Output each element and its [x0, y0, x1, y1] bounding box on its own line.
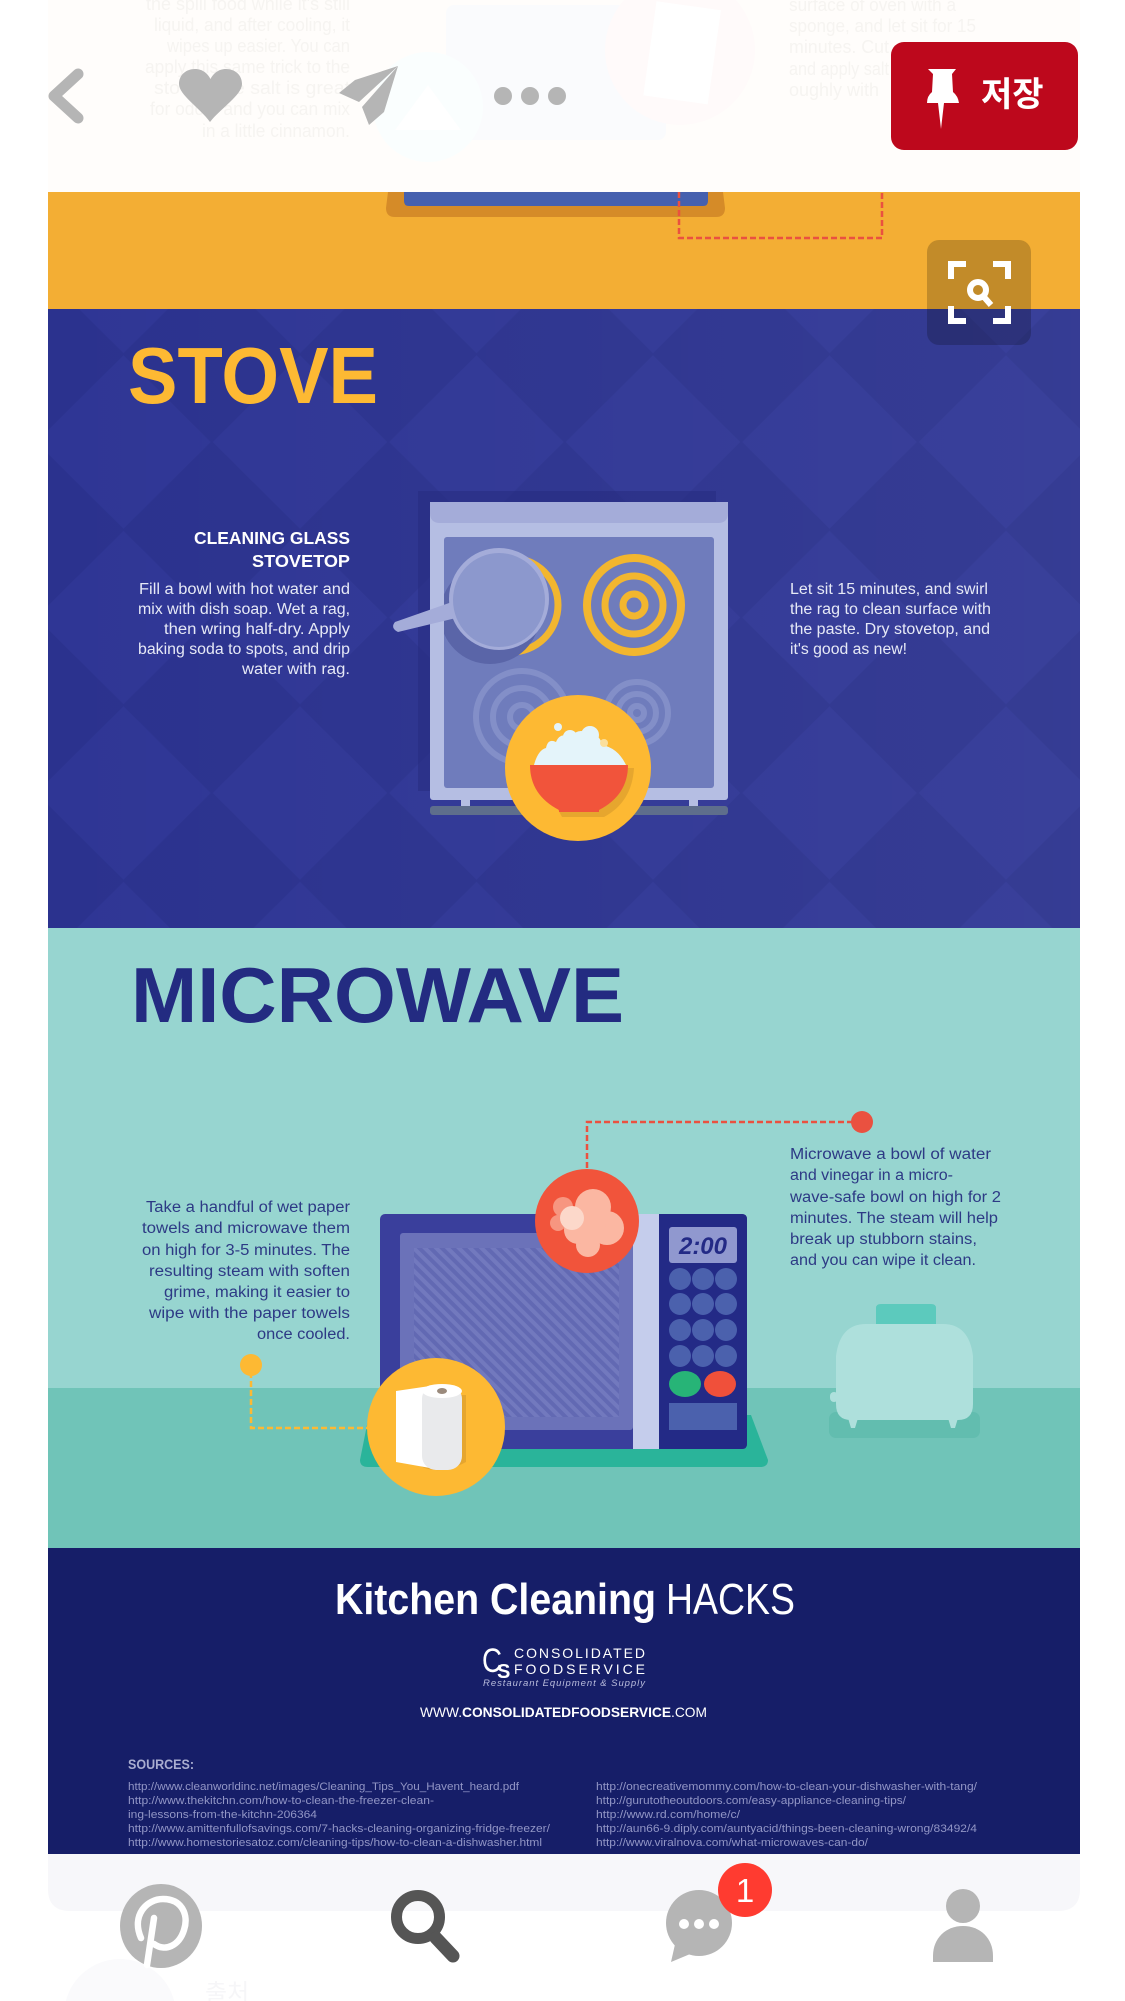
sources column 2: http://gurutotheoutdoors.com/easy-appliance-cleaning-tips/ — [596, 1795, 907, 1807]
footer title: HACKS — [666, 1575, 795, 1624]
icon: pin — [927, 69, 959, 129]
door handle bar — [633, 1214, 659, 1449]
text block: stove right: it's good as new! — [790, 641, 907, 658]
text block: microwave right: and vinegar in a micro- — [790, 1167, 953, 1184]
focus corners — [951, 264, 1008, 321]
back-left burner — [464, 558, 558, 652]
text block: cleaning glass stovetop: CLEANING GLASS — [194, 528, 350, 548]
sources column 1: http://www.thekitchn.com/how-to-clean-the-freezer-clean- — [128, 1795, 434, 1807]
back-right burner — [587, 558, 681, 652]
ghost illustration — [373, 0, 755, 162]
text block: cleaning glass stovetop: Fill a bowl with hot water and — [139, 581, 350, 598]
text block: stove right — [790, 581, 991, 658]
ghost text left: wipes up easier. You can — [166, 36, 350, 56]
notification badge: 1 — [736, 1872, 754, 1909]
panel: stove — [48, 309, 1080, 928]
text block: microwave left: grime, making it easier to — [164, 1284, 350, 1301]
top nav: send — [339, 66, 398, 125]
sources column 2: http://www.viralnova.com/what-microwaves-can-do/ — [596, 1837, 869, 1849]
sources column 2: http://aun66-9.diply.com/auntyacid/things-been-cleaning-wrong/83492/4 — [596, 1823, 977, 1835]
text block: microwave right: wave-safe bowl on high for 2 — [789, 1189, 1001, 1206]
top faded preview panel — [48, 0, 1080, 192]
text block: microwave right: break up stubborn stains, — [790, 1231, 977, 1248]
text block: microwave left: wipe with the paper towels — [148, 1305, 350, 1322]
sources heading: SOURCES: — [128, 1757, 194, 1772]
ghost text right — [789, 0, 976, 100]
top nav: more dots — [494, 87, 566, 105]
ghost text left: for odors and you can mix — [150, 99, 350, 119]
text block: stove right: Let sit 15 minutes, and swirl — [790, 581, 988, 598]
icon: frying pan — [393, 548, 549, 664]
ghost text left: in a little cinnamon. — [202, 121, 350, 141]
text block: microwave left — [142, 1199, 350, 1343]
control panel: 2:00 — [678, 1233, 728, 1260]
text block: microwave right: minutes. The steam will help — [790, 1210, 998, 1227]
top nav: back chevron — [54, 74, 78, 118]
icon: steam cloud — [535, 1169, 639, 1273]
logo: consolidated foodservice: Restaurant Equipment & Supply — [483, 1678, 646, 1689]
sources column 1: http://www.amittenfullofsavings.com/7-hacks-cleaning-organizing-fridge-freezer/ — [128, 1823, 551, 1835]
save button: 저장 — [981, 76, 1044, 114]
text block: stove right: the rag to clean surface with — [790, 601, 991, 618]
microwave illustration — [360, 1214, 768, 1467]
red dashed connector — [679, 192, 882, 238]
orange oven section — [48, 192, 1080, 309]
text block: cleaning glass stovetop: baking soda to spots, and drip — [138, 641, 350, 658]
toaster — [829, 1304, 980, 1438]
ghost text left: apply this same trick to the — [145, 57, 350, 77]
yellow dashed connector with dot — [240, 1354, 372, 1428]
bottom card edge — [48, 1854, 1080, 1911]
text block: microwave right — [789, 1146, 1001, 1269]
ghost text right: sponge, and let sit for 15 — [789, 16, 976, 36]
sources column 2: http://www.rd.com/home/c/ — [596, 1809, 741, 1821]
sources column 1: http://www.cleanworldinc.net/images/Cleaning_Tips_You_Havent_heard.pdf — [128, 1781, 520, 1793]
website url: WWW.CONSOLIDATEDFOODSERVICE.COM — [420, 1704, 707, 1720]
text block: cleaning glass stovetop: water with rag. — [241, 661, 350, 678]
icon: soapy bowl — [505, 695, 651, 841]
heading: stove: STOVE — [128, 331, 378, 420]
text block: cleaning glass stovetop — [138, 528, 350, 678]
ghost text right: and apply salt — [789, 59, 889, 79]
magnifier — [970, 282, 991, 305]
logo: consolidated foodservice: FOODSERVICE — [514, 1661, 645, 1677]
ghost text left: stove. The salt is great — [154, 78, 350, 98]
logo: consolidated foodservice — [482, 1642, 646, 1689]
control panel — [659, 1214, 747, 1449]
bottom nav: search — [396, 1896, 453, 1956]
sources column 2: http://onecreativemommy.com/how-to-clean-your-dishwasher-with-tang/ — [596, 1781, 978, 1793]
text block: microwave left: Take a handful of wet paper — [146, 1199, 350, 1216]
text block: cleaning glass stovetop: mix with dish soap. Wet a rag, — [138, 601, 350, 618]
sources column 1: http://www.homestoriesatoz.com/cleaning-tips/how-to-clean-a-dishwasher.html — [128, 1837, 542, 1849]
text block: microwave left: resulting steam with soften — [149, 1263, 350, 1280]
visual search button — [927, 240, 1031, 345]
red dashed connector with dot — [587, 1111, 873, 1168]
stove feet — [430, 800, 728, 815]
text block: stove right: the paste. Dry stovetop, and — [790, 621, 990, 638]
ghost text right: minutes. Cut — [789, 37, 889, 57]
logo: consolidated foodservice: S — [497, 1661, 510, 1683]
text block: microwave left: towels and microwave them — [142, 1220, 350, 1237]
text block: cleaning glass stovetop: then wring half-dry. Apply — [164, 621, 350, 638]
ghost text left: liquid, and after cooling, it — [154, 15, 350, 35]
sources column 1: ing-lessons-from-the-kitchn-206364 — [128, 1809, 317, 1821]
icon: paper towel roll — [367, 1358, 505, 1496]
footer title: Kitchen Cleaning — [335, 1575, 656, 1624]
bottom nav: profile — [933, 1889, 993, 1962]
panel: microwave — [48, 928, 1080, 1548]
sources column 1 — [128, 1781, 551, 1849]
stove illustration — [393, 491, 728, 815]
heading: microwave: MICROWAVE — [131, 951, 624, 1039]
oven base shadow — [386, 192, 725, 217]
oven base — [404, 192, 708, 206]
logo: consolidated foodservice: CONSOLIDATED — [514, 1645, 645, 1661]
microwave door — [400, 1233, 633, 1430]
ghost text left — [145, 0, 350, 141]
bottom nav: chat — [666, 1890, 732, 1962]
logo: consolidated foodservice: C — [482, 1642, 502, 1680]
panel: footer — [48, 1548, 1080, 1854]
save button — [891, 42, 1078, 150]
text block: microwave right: Microwave a bowl of water — [790, 1146, 991, 1163]
ghost next card — [64, 1959, 249, 2001]
text block: microwave left: once cooled. — [257, 1326, 350, 1343]
text block: cleaning glass stovetop: STOVETOP — [252, 551, 350, 571]
counter mat — [360, 1415, 768, 1467]
text block: microwave right: and you can wipe it clean. — [790, 1252, 976, 1269]
top nav: heart — [179, 69, 242, 122]
ghost text right: oughly with — [789, 80, 879, 100]
sources column 2 — [596, 1781, 978, 1849]
text block: microwave left: on high for 3-5 minutes. The — [142, 1242, 350, 1259]
front burners — [476, 671, 668, 763]
notification badge — [718, 1863, 772, 1917]
bottom nav: pinterest — [120, 1884, 202, 1968]
microwave body — [380, 1214, 747, 1449]
